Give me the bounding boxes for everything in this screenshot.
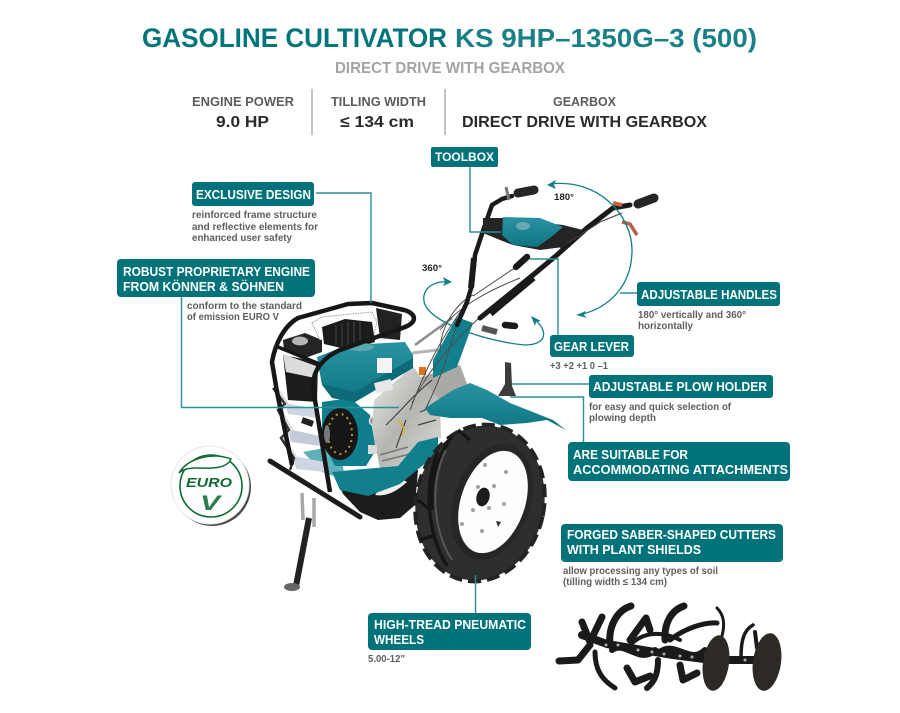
callout: adjustable handles xyxy=(620,282,780,332)
callout: attachments xyxy=(510,397,790,481)
callout: forged cutters: FORGED SABER-SHAPED CUTTERS xyxy=(567,527,776,542)
callout: forged cutters: allow processing any types of soil xyxy=(563,566,718,577)
callout: forged cutters xyxy=(561,524,783,588)
spec: gearbox: GEARBOX xyxy=(553,94,616,109)
callout: exclusive design: and reflective elements for xyxy=(192,222,318,233)
label: 360 degrees: 360° xyxy=(422,263,442,274)
specifications row xyxy=(192,89,707,135)
title: KS 9HP–1350G–3 (500) xyxy=(455,23,757,53)
toolbox xyxy=(483,217,583,250)
subtitle: DIRECT DRIVE WITH GEARBOX xyxy=(335,60,566,77)
starter housing xyxy=(322,398,378,466)
cutters attachment xyxy=(559,606,785,693)
steering column xyxy=(433,317,473,378)
callout: pneumatic wheels xyxy=(368,575,531,665)
callout: exclusive design: enhanced user safety xyxy=(192,233,292,244)
callout: exclusive design: EXCLUSIVE DESIGN xyxy=(196,187,311,202)
callout: robust proprietary engine: FROM KÖNNER & SÖHNEN xyxy=(123,279,284,294)
fuel tank xyxy=(317,342,413,402)
callout: gear lever xyxy=(530,259,634,372)
rear wheel xyxy=(336,470,418,520)
silver chassis xyxy=(405,365,470,408)
callout: exclusive design: reinforced frame structure xyxy=(192,210,317,221)
icon: Euro V emblem xyxy=(171,446,251,526)
callout: adjustable handles: ADJUSTABLE HANDLES xyxy=(641,287,777,302)
spec: tilling width: TILLING WIDTH xyxy=(331,94,426,109)
icon: Euro V emblem: V xyxy=(200,492,223,515)
arrow: 180 degree handle rotation xyxy=(547,180,632,318)
callout: adjustable handles: horizontally xyxy=(638,321,693,332)
spec: gearbox xyxy=(462,94,707,131)
callout: robust proprietary engine xyxy=(117,259,399,408)
callout: adjustable plow holder: ADJUSTABLE PLOW HOLDER xyxy=(593,379,768,394)
callout: robust proprietary engine: conform to the standard xyxy=(187,301,302,312)
callout: pneumatic wheels: WHEELS xyxy=(374,632,424,647)
spec: tilling width xyxy=(331,94,426,131)
spec: tilling width: ≤ 134 cm xyxy=(340,114,414,131)
arrow: 360 degree handle rotation xyxy=(424,277,544,345)
callout: forged cutters: (tilling width ≤ 134 cm) xyxy=(563,577,667,588)
label: 180 degrees: 180° xyxy=(554,192,574,203)
callout: forged cutters: WITH PLANT SHIELDS xyxy=(567,542,701,557)
callout: robust proprietary engine: ROBUST PROPRIETARY ENGINE xyxy=(123,264,310,279)
plow holder xyxy=(498,362,516,396)
cutter blades xyxy=(559,606,758,688)
spec: gearbox: DIRECT DRIVE WITH GEARBOX xyxy=(462,114,707,131)
gear lever xyxy=(516,257,527,267)
control cables xyxy=(410,267,520,410)
left handle xyxy=(457,196,512,325)
callout: adjustable handles: 180° vertically and 360° xyxy=(638,310,746,321)
callout: robust proprietary engine: of emission EURO V xyxy=(187,312,279,323)
spec: engine power: 9.0 HP xyxy=(216,114,269,131)
reflective guard panels xyxy=(273,387,345,480)
callout: adjustable plow holder: for easy and quick selection of xyxy=(589,402,732,413)
right handle xyxy=(480,205,630,318)
callout: pneumatic wheels: HIGH-TREAD PNEUMATIC xyxy=(374,617,527,632)
callout: pneumatic wheels: 5.00-12" xyxy=(368,654,405,665)
air filter xyxy=(312,308,402,350)
title: GASOLINE CULTIVATOR xyxy=(142,23,447,53)
callout: adjustable plow holder: plowing depth xyxy=(589,413,656,424)
callout: attachments: ACCOMMODATING ATTACHMENTS xyxy=(573,462,788,477)
callout: toolbox: TOOLBOX xyxy=(435,150,494,164)
cutter discs xyxy=(699,633,733,693)
engine left side xyxy=(283,333,322,402)
callout: exclusive design xyxy=(192,182,371,303)
callout: toolbox xyxy=(431,147,501,232)
callout: adjustable plow holder xyxy=(512,375,773,424)
front fender xyxy=(425,383,566,430)
protective frame tube xyxy=(272,303,414,492)
crankcase silver xyxy=(372,366,441,468)
spec: engine power: ENGINE POWER xyxy=(192,94,295,109)
callout: gear lever: GEAR LEVER xyxy=(554,339,630,354)
callout: attachments: ARE SUITABLE FOR xyxy=(573,447,689,462)
callout: gear lever: +3 +2 +1 0 –1 xyxy=(550,361,608,372)
front wheel xyxy=(401,412,559,594)
title xyxy=(142,23,757,53)
kick stand xyxy=(270,461,360,591)
cultivator machine xyxy=(270,187,654,594)
icon: Euro V emblem: EURO xyxy=(186,475,232,490)
handle pivot knob xyxy=(482,328,497,332)
spec: engine power xyxy=(192,94,295,131)
bottom pan xyxy=(332,437,438,496)
